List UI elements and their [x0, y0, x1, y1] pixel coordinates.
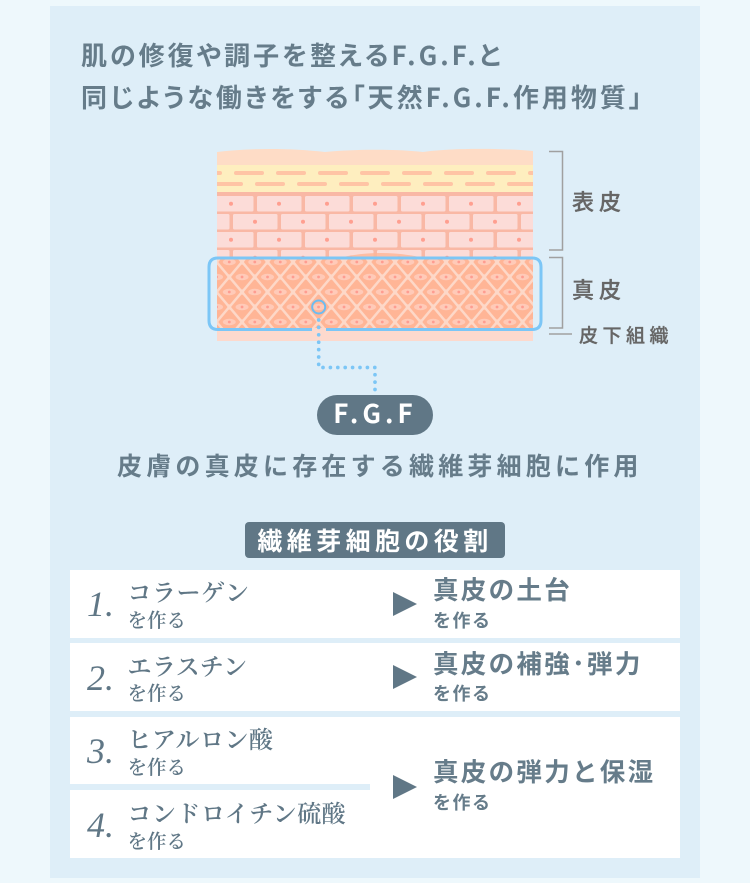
number 3: 3.	[87, 731, 114, 771]
number 2: 2.	[87, 658, 114, 698]
collagen: コラーゲン	[128, 573, 250, 608]
title line 1: 肌の修復や調子を整えるF.G.F.と	[81, 36, 503, 73]
hyaluronic acid: ヒアルロン酸	[128, 720, 274, 755]
chondroitin sulfate: コンドロイチン硫酸	[128, 794, 346, 829]
row 4	[70, 790, 370, 858]
result 1: 真皮の土台	[433, 570, 572, 607]
elastin: エラスチン	[128, 647, 248, 682]
hyaluronic suffix: を作る	[128, 752, 186, 780]
row 3	[70, 717, 370, 784]
result 3 suffix: を作る	[433, 789, 492, 815]
merged result cell	[370, 717, 680, 858]
result 1 suffix: を作る	[433, 607, 492, 633]
yellow granular layer	[217, 165, 533, 192]
title	[81, 36, 645, 115]
highlight circle	[312, 300, 325, 314]
arrow 2	[393, 665, 417, 689]
subcutaneous layer	[217, 328, 533, 341]
label: subcutaneous tissue: 皮下組織	[579, 321, 673, 348]
row 1	[70, 570, 680, 638]
epidermis bracket	[549, 152, 562, 250]
arrow 3	[393, 775, 417, 799]
label: epidermis: 表皮	[572, 185, 626, 217]
result 2 suffix: を作る	[433, 680, 492, 706]
F.G.F pill: F.G.F	[333, 394, 417, 431]
result 2: 真皮の補強･弾力	[433, 644, 643, 681]
collagen suffix: を作る	[128, 605, 186, 633]
skin layers diagram	[208, 148, 572, 392]
subcutaneous tick	[549, 333, 572, 335]
description text: 皮膚の真皮に存在する繊維芽細胞に作用	[117, 447, 643, 483]
chondroitin suffix: を作る	[128, 826, 186, 854]
number 4: 4.	[87, 805, 114, 845]
roles heading: 繊維芽細胞の役割	[257, 522, 493, 558]
brick cell layer	[217, 192, 533, 258]
number 1: 1.	[87, 584, 114, 624]
dermis bracket	[549, 258, 562, 328]
title line 2: 同じような働きをする「天然F.G.F.作用物質」	[81, 78, 645, 115]
row 2	[70, 643, 680, 711]
dotted leader line	[319, 320, 375, 393]
F.G.F pill	[317, 395, 433, 435]
highlight frame	[209, 258, 541, 330]
result 3: 真皮の弾力と保湿	[433, 752, 655, 789]
elastin suffix: を作る	[128, 678, 186, 706]
label: dermis: 真皮	[572, 273, 626, 305]
dermis diamond layer	[217, 257, 533, 328]
stratum corneum layer	[217, 149, 533, 166]
arrow 1	[393, 592, 417, 616]
